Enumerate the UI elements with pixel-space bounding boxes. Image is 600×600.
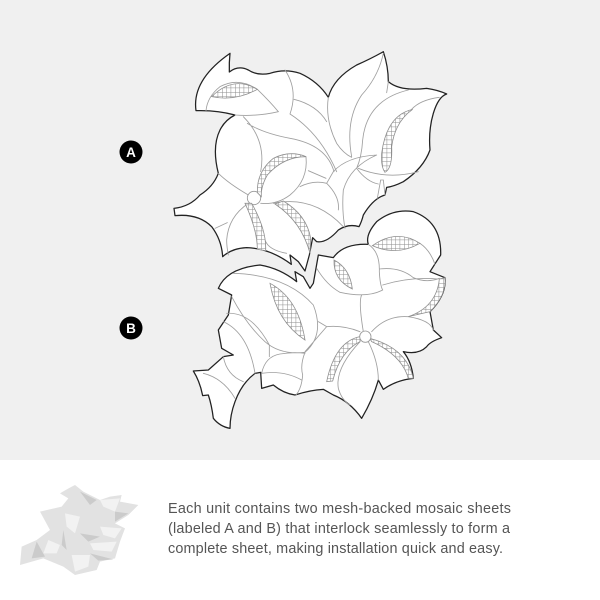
- petal mosaic band lower right: [275, 201, 311, 253]
- caption text: Each unit contains two mesh-backed mosaic sheets: [168, 501, 511, 517]
- badge: B: [120, 316, 142, 340]
- panel: white caption strip: [0, 460, 600, 600]
- photo shadows: [32, 492, 128, 561]
- mosaic sheet A line drawing: [174, 52, 447, 271]
- sheet B large leaf mosaic band: [270, 283, 305, 340]
- sheet B petal and leaf lines: [203, 243, 439, 405]
- sheet B flower centre: [360, 331, 371, 342]
- badge: A: [120, 140, 142, 164]
- flower centre: [247, 191, 261, 205]
- sheet B bud mosaic band: [334, 260, 352, 289]
- sheet A outline: [174, 52, 447, 271]
- badge: B: B: [126, 321, 136, 336]
- caption text: [168, 501, 511, 557]
- petal mosaic band upper: [257, 154, 306, 197]
- sheet B top arc mosaic band: [372, 236, 420, 251]
- mosaic sheet B line drawing: [193, 211, 445, 428]
- sheet A right mosaic band: [381, 109, 413, 172]
- panel: grey diagram background: [0, 0, 600, 460]
- caption text: (labeled A and B) that interlock seamlessly to form a: [168, 521, 510, 537]
- product photo: mosaic sheet: [20, 485, 138, 575]
- sheet A petal and leaf lines: [206, 53, 439, 255]
- photo silhouette: [20, 485, 138, 575]
- sheet A top-left mosaic band: [212, 84, 257, 98]
- badge: A: A: [126, 145, 136, 160]
- caption text: complete sheet, making installation quick and easy.: [168, 541, 503, 557]
- sheet B flower left mosaic band: [327, 337, 360, 382]
- photo highlights: [43, 498, 122, 572]
- sheet B right edge mosaic band: [408, 278, 445, 317]
- sheet B flower right mosaic band: [370, 338, 413, 378]
- petal mosaic band lower left: [245, 203, 266, 251]
- sheet B outline: [193, 211, 445, 428]
- top-right petal outline: [261, 157, 306, 204]
